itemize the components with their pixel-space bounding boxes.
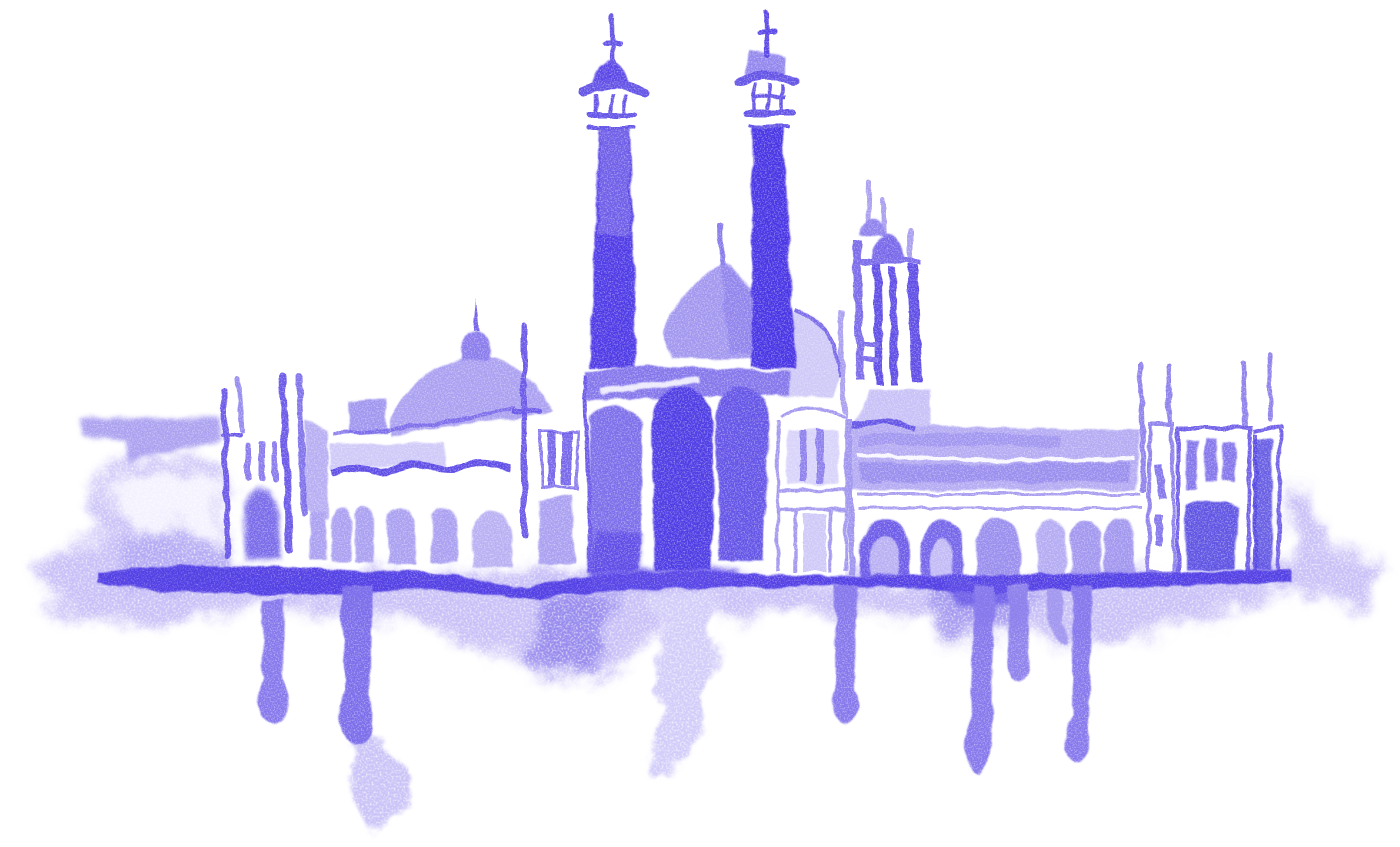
sketched skyline [80, 12, 1290, 775]
right end towers [1141, 355, 1283, 575]
left buildings wash [222, 298, 578, 568]
minaret left [584, 15, 645, 368]
main dome [663, 260, 780, 360]
ground line [98, 566, 1290, 605]
right dome [778, 310, 840, 398]
right long wing [848, 420, 1142, 578]
paint drips [259, 585, 1092, 775]
left cloud stroke [80, 418, 220, 460]
minaret right [740, 12, 796, 368]
background wash [30, 454, 1385, 827]
gate pavilion [776, 404, 846, 575]
arcade base [585, 365, 790, 400]
right tower cluster [840, 182, 930, 430]
central mosque [584, 12, 840, 575]
